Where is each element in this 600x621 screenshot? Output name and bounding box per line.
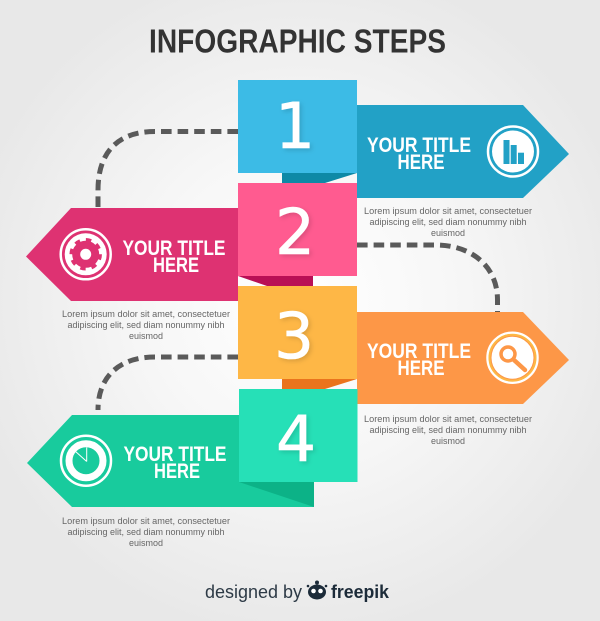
footer credit <box>205 580 390 602</box>
square: step 1: 1 <box>275 90 315 163</box>
step 2 description <box>62 309 231 342</box>
footer credit: freepik <box>331 581 390 602</box>
step 3 description: Lorem ipsum dolor sit amet, consectetuer <box>364 414 533 425</box>
step 1 description: adipiscing elit, sed diam nonummy nibh <box>370 217 526 228</box>
square: step 1 <box>238 80 357 173</box>
step 4 description: Lorem ipsum dolor sit amet, consectetuer <box>62 516 231 527</box>
step 4 fold <box>239 482 314 507</box>
step 3 arrow panel <box>282 312 569 404</box>
square: step 2 <box>238 183 357 276</box>
step 1 arrow panel <box>282 105 569 198</box>
step 4 title <box>124 443 226 483</box>
dashed connector: step 2 to 3 <box>357 245 498 312</box>
step 4 title: HERE <box>154 460 200 483</box>
step 2 title <box>122 237 226 277</box>
step 2 description: Lorem ipsum dolor sit amet, consectetuer <box>62 309 231 320</box>
step 1 description <box>364 206 533 239</box>
step 4 title: YOUR TITLE <box>124 443 226 466</box>
dashed connector: step 1 to 2 <box>98 132 238 208</box>
step 2 title: HERE <box>153 254 199 277</box>
step 3 title: YOUR TITLE <box>367 340 471 363</box>
footer credit: designed by <box>205 582 302 602</box>
square: step 3 <box>238 286 357 379</box>
icon: gear <box>61 229 111 279</box>
step 1 description: euismod <box>431 228 465 239</box>
step 3 fold <box>282 379 357 389</box>
step 2 fold <box>238 276 313 286</box>
icon: bar chart <box>488 126 538 176</box>
step 3 description: adipiscing elit, sed diam nonummy nibh <box>370 425 526 436</box>
step 3 description: euismod <box>431 436 465 447</box>
square: step 4 <box>239 389 358 482</box>
step 4 description: euismod <box>129 538 163 549</box>
dashed connector: step 3 to 4 <box>98 357 238 410</box>
square: step 2: 2 <box>275 196 315 269</box>
step 1 fold <box>282 173 357 183</box>
step 1 description: Lorem ipsum dolor sit amet, consectetuer <box>364 206 533 217</box>
step 1 title: HERE <box>398 151 444 174</box>
step 4 description: adipiscing elit, sed diam nonummy nibh <box>68 527 224 538</box>
step 4 arrow panel <box>27 415 314 507</box>
square: step 4: 4 <box>276 403 316 476</box>
step 3 title: HERE <box>398 357 444 380</box>
square: step 3: 3 <box>274 300 314 373</box>
step 4 description <box>62 516 231 549</box>
step 2 arrow panel <box>26 208 238 301</box>
step 2 description: euismod <box>129 331 163 342</box>
icon: pie timer <box>61 436 111 486</box>
step 1 title: YOUR TITLE <box>367 134 471 157</box>
step 2 title: YOUR TITLE <box>122 237 226 260</box>
step 2 description: adipiscing elit, sed diam nonummy nibh <box>68 320 224 331</box>
step 3 title <box>367 340 471 380</box>
title: INFOGRAPHIC STEPS <box>149 22 446 60</box>
step 3 description <box>364 414 533 447</box>
icon: magnifier <box>488 333 538 383</box>
step 1 title <box>367 134 471 174</box>
icon: freepik mascot <box>307 580 327 600</box>
